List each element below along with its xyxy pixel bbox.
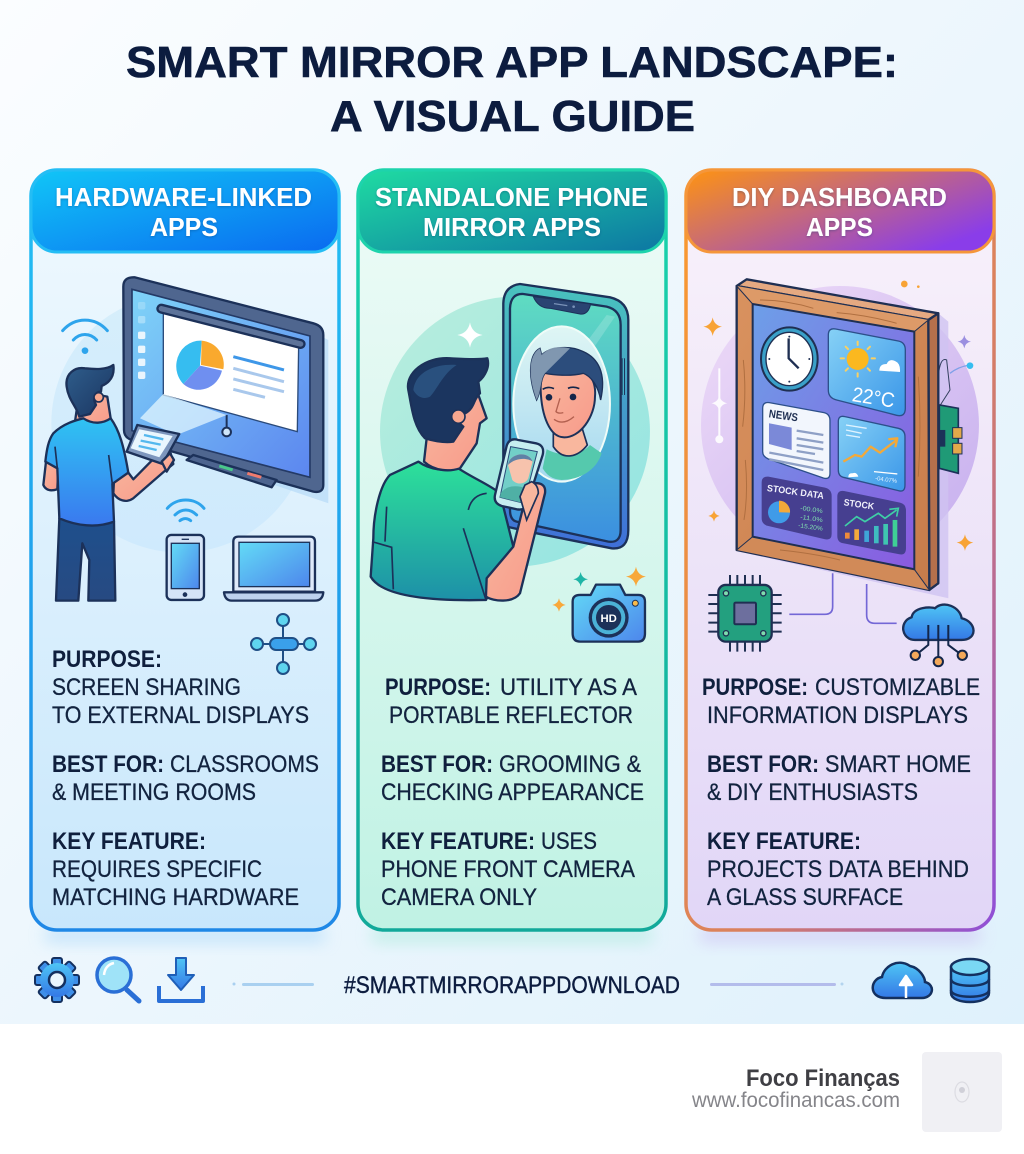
weather widget bbox=[828, 329, 905, 416]
text block: diy dashboard details bbox=[702, 674, 980, 911]
stock data widget: -00.0% bbox=[800, 505, 824, 515]
divider line right bbox=[710, 982, 844, 986]
stock widget: STOCK bbox=[843, 497, 875, 512]
best for: BEST FOR: bbox=[52, 751, 164, 778]
key feature: KEY FEATURE: bbox=[381, 828, 535, 855]
panel header: diy dashboard apps: APPS bbox=[806, 212, 873, 242]
purpose: SCREEN SHARING bbox=[52, 674, 241, 701]
small phone in hand bbox=[495, 439, 543, 520]
icon: gear bbox=[35, 958, 79, 1002]
circuit board on frame bbox=[938, 360, 973, 473]
purpose: PURPOSE: bbox=[702, 674, 808, 701]
key feature: PHONE FRONT CAMERA bbox=[381, 856, 635, 883]
icon: wifi above person bbox=[63, 320, 107, 354]
best for: SMART HOME bbox=[825, 751, 971, 778]
illustration: wooden frame dashboard bbox=[701, 279, 979, 666]
person from behind bbox=[371, 358, 545, 601]
icon: cloud with circuit bbox=[903, 605, 974, 666]
key feature bbox=[707, 828, 969, 911]
stock widget bbox=[837, 491, 906, 554]
hashtag: #SMARTMIRRORAPPDOWNLOAD bbox=[344, 972, 680, 999]
purpose bbox=[702, 674, 980, 729]
key feature bbox=[52, 828, 299, 911]
best for bbox=[381, 751, 644, 806]
key feature: KEY FEATURE: bbox=[707, 828, 861, 855]
divider line left bbox=[232, 982, 314, 986]
panel header: standalone phone mirror apps: MIRROR APPS bbox=[423, 212, 601, 242]
person from behind bbox=[43, 365, 173, 601]
news widget bbox=[763, 403, 830, 478]
illustration: person holding a phone mirror bbox=[371, 284, 650, 642]
panel header: diy dashboard apps: DIY DASHBOARD bbox=[732, 182, 947, 212]
wooden frame bbox=[737, 279, 938, 590]
icon: hd camera bbox=[552, 567, 646, 642]
text block: standalone phone details bbox=[381, 674, 644, 911]
news widget: NEWS bbox=[768, 408, 799, 424]
best for bbox=[707, 751, 971, 806]
purpose: TO EXTERNAL DISPLAYS bbox=[52, 702, 309, 729]
connector lines bbox=[789, 573, 897, 623]
title: SMART MIRROR APP LANDSCAPE: bbox=[126, 38, 898, 87]
large phone mirror bbox=[503, 284, 628, 548]
stock data widget bbox=[762, 477, 832, 540]
key feature: MATCHING HARDWARE bbox=[52, 884, 299, 911]
footer white band bbox=[0, 1024, 1024, 1154]
chart widget: -04.07% bbox=[875, 476, 898, 485]
best for: & MEETING ROOMS bbox=[52, 779, 256, 806]
footer logo placeholder bbox=[922, 1052, 1002, 1132]
panel header: standalone phone mirror apps: STANDALONE PHONE bbox=[375, 182, 648, 212]
key feature: PROJECTS DATA BEHIND bbox=[707, 856, 969, 883]
weather widget: 22°C bbox=[851, 383, 896, 413]
purpose: PORTABLE REFLECTOR bbox=[389, 702, 633, 729]
text block: hardware-linked details bbox=[52, 646, 319, 911]
illustration: person sharing a tablet to a wall display bbox=[43, 277, 328, 601]
footer website: www.focofinancas.com bbox=[691, 1089, 900, 1112]
key feature bbox=[381, 828, 635, 911]
best for: CLASSROOMS bbox=[170, 751, 319, 778]
icon: phone bbox=[167, 535, 204, 600]
stock data widget: -11.0% bbox=[800, 514, 824, 524]
icon: download bbox=[159, 958, 203, 1001]
stock data widget: -15.20% bbox=[798, 522, 823, 533]
best for: BEST FOR: bbox=[707, 751, 819, 778]
oval mirror reflection bbox=[513, 326, 610, 482]
best for bbox=[52, 751, 319, 806]
tablet bbox=[127, 425, 179, 472]
wall display bbox=[123, 277, 323, 492]
slider decoration bbox=[711, 368, 727, 443]
title bbox=[126, 38, 898, 141]
key feature: REQUIRES SPECIFIC bbox=[52, 856, 262, 883]
icon: white sparkle bbox=[457, 322, 483, 348]
icon: wifi near devices bbox=[167, 500, 204, 521]
icon: database bbox=[951, 959, 989, 1002]
panel header: hardware-linked apps bbox=[31, 170, 339, 252]
clock widget bbox=[761, 327, 818, 391]
panel header: diy dashboard apps bbox=[686, 170, 994, 252]
panel header: hardware-linked apps: APPS bbox=[150, 212, 218, 242]
panel header: standalone phone mirror apps bbox=[358, 170, 666, 252]
icon: circuit chip bbox=[708, 575, 782, 652]
purpose: UTILITY AS A bbox=[500, 674, 637, 701]
pie chart on screen bbox=[176, 341, 224, 390]
icon: hd camera: HD bbox=[600, 613, 617, 625]
best for: GROOMING & bbox=[499, 751, 641, 778]
icon: magnifier bbox=[97, 958, 139, 1001]
icon: network nodes bbox=[251, 614, 316, 674]
footer brand name: Foco Finanças bbox=[746, 1065, 900, 1092]
sound bar bbox=[187, 455, 277, 487]
purpose: PURPOSE: bbox=[385, 674, 491, 701]
stock data widget: STOCK DATA bbox=[766, 483, 825, 501]
key feature: CAMERA ONLY bbox=[381, 884, 537, 911]
key feature: USES bbox=[541, 828, 597, 855]
purpose: PURPOSE: bbox=[52, 646, 162, 673]
title: A VISUAL GUIDE bbox=[330, 92, 695, 141]
panel: hardware-linked apps bbox=[31, 170, 339, 930]
panel header: hardware-linked apps: HARDWARE-LINKED bbox=[55, 182, 312, 212]
best for: & DIY ENTHUSIASTS bbox=[707, 779, 918, 806]
purpose: CUSTOMIZABLE bbox=[815, 674, 980, 701]
panel: diy dashboard apps bbox=[686, 170, 994, 930]
purpose bbox=[52, 646, 309, 729]
icon: laptop bbox=[224, 537, 323, 601]
best for: BEST FOR: bbox=[381, 751, 493, 778]
decorative sparkles bbox=[703, 281, 973, 551]
key feature: A GLASS SURFACE bbox=[707, 884, 903, 911]
purpose bbox=[385, 674, 637, 729]
icon: cloud upload bbox=[873, 963, 932, 998]
panel: standalone phone mirror apps bbox=[358, 170, 666, 930]
best for: CHECKING APPEARANCE bbox=[381, 779, 644, 806]
key feature: KEY FEATURE: bbox=[52, 828, 206, 855]
purpose: INFORMATION DISPLAYS bbox=[707, 702, 968, 729]
chart widget bbox=[838, 416, 905, 491]
